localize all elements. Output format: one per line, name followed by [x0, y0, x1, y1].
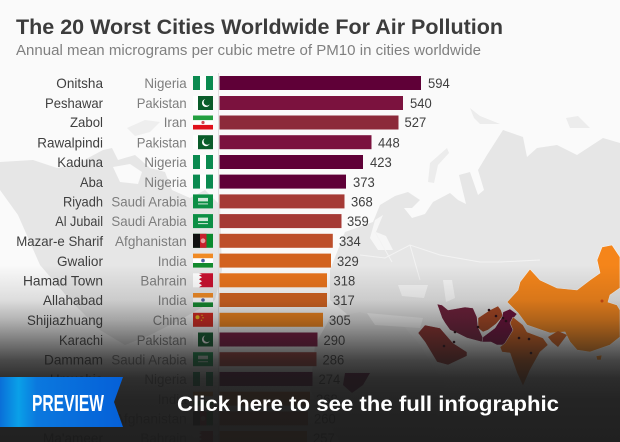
- row: Peshawar: 540: [410, 95, 432, 111]
- row: Gwalior: Gwalior: [57, 253, 103, 269]
- row: Hamad Town: Bahrain: [140, 272, 187, 288]
- map: china: [507, 245, 620, 360]
- row: India 268: India: [158, 391, 187, 407]
- row: Allahabad: 317: [333, 292, 355, 308]
- map: nigeria: [343, 373, 370, 393]
- row: Rawalpindi: Pakistan: [137, 134, 187, 150]
- row: Al Jubail: [55, 213, 369, 229]
- row: Karachi: Pakistan: [137, 332, 187, 348]
- row: Kaduna: 423: [370, 154, 392, 170]
- title: The 20 Worst Cities Worldwide For Air Pollution: [16, 16, 503, 39]
- row: Al Jubail: 359: [347, 213, 369, 229]
- row: Dammam: 286: [322, 352, 344, 368]
- row: Shijiazhuang: China: [153, 312, 187, 328]
- row: Umuahia: Umuahia: [50, 371, 103, 387]
- row: Umuahia: Nigeria: [144, 371, 187, 387]
- row: Kaduna: Kaduna: [57, 154, 103, 170]
- row: Afghanistan 260: 260: [314, 410, 336, 426]
- row: Mazar-e Sharif: Afghanistan: [115, 233, 187, 249]
- row: Dammam: Dammam: [44, 352, 103, 368]
- map: hudson bay: [113, 164, 142, 184]
- row: Onitsha: Onitsha: [56, 75, 103, 91]
- row: Riyadh: Riyadh: [63, 194, 103, 210]
- row: Ma'ameer: [43, 430, 335, 442]
- row: Afghanistan 260: [115, 410, 336, 426]
- dark fade overlay: [0, 265, 620, 442]
- map: india: [500, 317, 548, 386]
- map: country borders: [360, 232, 540, 280]
- row: Umuahia: [50, 371, 340, 387]
- row: India 268: [158, 391, 338, 407]
- row: Aba: Nigeria: [144, 174, 187, 190]
- map: pakistan: [482, 309, 517, 345]
- row: Shijiazhuang: Shijiazhuang: [27, 312, 103, 328]
- row: Allahabad: India: [158, 292, 187, 308]
- row: Mazar-e Sharif: Mazar-e Sharif: [16, 233, 103, 249]
- row: Afghanistan 260: Afghanistan: [115, 410, 187, 426]
- preview label: PREVIEW: [32, 390, 104, 416]
- row: Kaduna: Nigeria: [144, 154, 187, 170]
- row: Gwalior: India: [158, 253, 187, 269]
- row: Shijiazhuang: 305: [329, 312, 351, 328]
- row: Rawalpindi: 448: [378, 134, 400, 150]
- row: Rawalpindi: [37, 134, 400, 150]
- row: Hamad Town: [23, 272, 355, 288]
- map: myanmar region: [548, 331, 567, 347]
- map: africa: [310, 312, 445, 442]
- row: Onitsha: Nigeria: [144, 75, 187, 91]
- row: Shijiazhuang: [27, 312, 351, 328]
- row: Gwalior: 329: [337, 253, 359, 269]
- row: Onitsha: 594: [428, 75, 450, 91]
- row: India 268: 268: [316, 391, 338, 407]
- row: Gwalior: [57, 253, 359, 269]
- row: Zabol: Zabol: [70, 114, 103, 130]
- row: Zabol: [70, 114, 426, 130]
- map: arctic islands: [127, 120, 160, 136]
- row: Aba: [80, 174, 375, 190]
- row: Hamad Town: 318: [334, 272, 355, 288]
- row: Aba: Aba: [80, 174, 103, 190]
- map: eurasia: [330, 130, 620, 442]
- map: north america: [0, 148, 222, 345]
- map: iran: [437, 304, 483, 342]
- map: shijiazhuang marker: [600, 300, 604, 302]
- world map: [0, 108, 620, 442]
- row: Hamad Town: Hamad Town: [23, 272, 103, 288]
- row: Zabol: 527: [404, 114, 426, 130]
- row: Al Jubail: Saudi Arabia: [111, 213, 187, 229]
- row: Allahabad: [43, 292, 355, 308]
- row: Karachi: Karachi: [59, 332, 103, 348]
- row: Mazar-e Sharif: [16, 233, 361, 249]
- row: Kaduna: [57, 154, 392, 170]
- row: Al Jubail: Al Jubail: [55, 213, 103, 229]
- map: seas: [367, 215, 455, 328]
- map: novaya zemlya and arctic land: [428, 108, 590, 183]
- row: Riyadh: 368: [351, 194, 373, 210]
- row: Mazar-e Sharif: 334: [339, 233, 361, 249]
- row: Dammam: Saudi Arabia: [111, 352, 187, 368]
- row: Zabol: Iran: [164, 114, 187, 130]
- row: Riyadh: Saudi Arabia: [111, 194, 187, 210]
- map: afghanistan: [478, 306, 503, 332]
- preview ribbon: [0, 377, 123, 427]
- row: Aba: 373: [353, 174, 375, 190]
- row: Peshawar: [45, 95, 432, 111]
- bar chart: [16, 73, 450, 442]
- row: Onitsha: [56, 75, 450, 91]
- map: city markers: [443, 309, 532, 354]
- row: Rawalpindi: Rawalpindi: [37, 134, 103, 150]
- map: saudi arabia: [418, 325, 467, 365]
- row: Riyadh: [63, 194, 373, 210]
- row: Dammam: [44, 352, 344, 368]
- row: Allahabad: Allahabad: [43, 292, 103, 308]
- row: Peshawar: Pakistan: [137, 95, 187, 111]
- row: Umuahia: 274: [318, 371, 340, 387]
- row: Peshawar: Peshawar: [45, 95, 103, 111]
- call to action: Click here to see the full infographic: [177, 393, 559, 416]
- row: Karachi: 290: [324, 332, 345, 348]
- row: Karachi: [59, 332, 345, 348]
- subtitle: Annual mean micrograms per cubic metre of PM10 in cities worldwide: [16, 42, 481, 59]
